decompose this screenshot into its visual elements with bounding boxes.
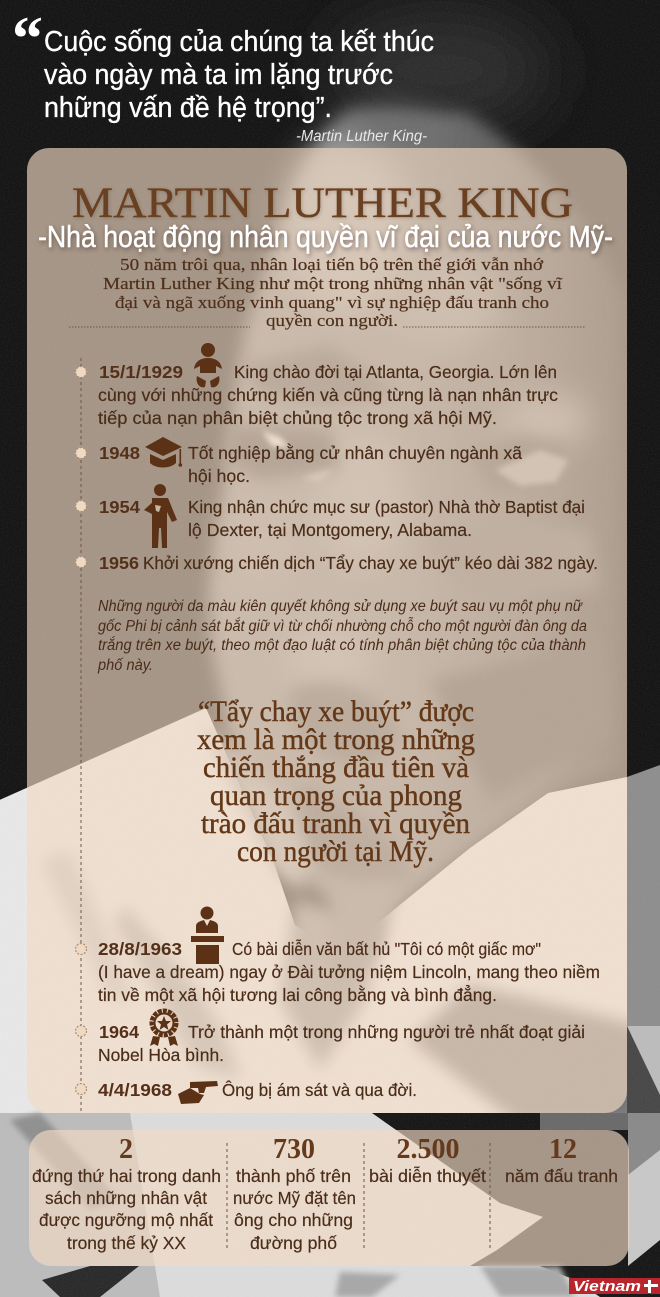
stat: 730 [233,1134,356,1253]
event: 1954 pastor: 1954 [99,497,140,517]
callout: quan trọng của phong [210,779,462,812]
stat: 2: đứng thứ hai trong danh [32,1166,221,1186]
stat: 730: thành phố trên [236,1166,351,1186]
stat: 2.500: 2.500 [396,1134,460,1165]
stat: 2: sách những nhân vật [45,1188,207,1208]
event: 1964 Nobel: Nobel Hòa bình. [98,1045,224,1065]
event: 1963 speech: (I have a dream) ngay ở Đài tưởng niệm Lincoln, mang theo niềm [98,962,600,982]
lower shirt and tie [130,1113,600,1297]
event: 1948 graduation: hội học. [188,466,250,486]
panel: main biography [27,148,627,1113]
boycott explanation [97,598,587,674]
boycott explanation: Những người da màu kiên quyết không sử dụng xe buýt sau vụ một phụ nữ [98,598,583,615]
event: 1948 graduation: Tốt nghiệp bằng cử nhân chuyên ngành xã [188,442,522,463]
event: 1963 speech: 28/8/1963 [98,939,182,959]
face [208,112,625,925]
callout: trào đấu tranh vì quyền [201,807,470,840]
stat: 730: nước Mỹ đặt tên [233,1188,356,1208]
intro text: quyền con người. [266,311,398,330]
panel: statistics [29,1130,629,1266]
logo: Vietnam+: Vietnam [573,1278,641,1295]
boycott explanation: gốc Phi bị cảnh sát bắt giữ vì từ chối nhường chỗ cho một người đàn ông da [98,618,587,635]
boycott explanation: trắng trên xe buýt, theo một đạo luật có tính phân biệt chủng tộc của thành [98,637,586,654]
icon: pastor [144,484,177,548]
stat: 2: được ngưỡng mộ nhất [39,1210,213,1230]
event: 1929 birth: King chào đời tại Atlanta, Georgia. Lớn lên [234,362,557,382]
icon: speaker at lectern [191,906,224,964]
callout: chiến thắng đầu tiên và [203,751,469,784]
callout: con người tại Mỹ. [237,835,434,868]
event: 1929 birth: cùng với những chứng kiến và cũng từng là nạn nhân trực [98,385,558,405]
event: 1929 birth: tiếp của nạn phân biệt chủng tộc trong xã hội Mỹ. [98,408,497,428]
icon: graduation cap [145,437,182,468]
stat: 12: năm đấu tranh [505,1166,618,1186]
event: 1963 speech [98,938,600,1005]
forehead highlights [272,92,592,672]
event: 1954 pastor [99,497,585,540]
logo: Vietnam+ [569,1278,660,1295]
event: 1956 boycott: 1956 [99,553,139,573]
event: 1963 speech: Có bài diễn văn bất hủ "Tôi có một giấc mơ" [232,938,541,959]
stat: 2 [32,1134,221,1253]
event: 1954 pastor: King nhận chức mục sư (pastor) Nhà thờ Baptist đại [188,497,585,517]
opening quote [44,26,434,124]
event: 1963 speech: tin về một xã hội tương lai công bằng và bình đẳng. [98,984,497,1005]
timeline axis [80,358,82,1113]
title: MARTIN LUTHER KING [72,180,573,227]
opening quote: những vấn đề hệ trọng”. [44,92,332,124]
right edge shirt [627,765,660,1026]
stat: 2.500 [369,1134,486,1186]
icon: baby [194,343,222,387]
icon: medal [150,1011,178,1046]
stat: 2: 2 [119,1134,133,1165]
event: 1948 graduation [99,442,522,486]
stat: 12 [505,1134,618,1186]
stat: 730: ông cho những [234,1210,353,1230]
event: 1956 boycott: Khởi xướng chiến dịch “Tẩy chay xe buýt” kéo dài 382 ngày. [143,553,598,573]
event: 1968 assassination: 4/4/1968 [98,1080,172,1100]
event: 1964 Nobel: 1964 [99,1022,139,1042]
stat: 2: trong thế kỷ XX [67,1233,186,1253]
statistics [32,1134,618,1253]
event: 1968 assassination: Ông bị ám sát và qua đời. [222,1079,417,1100]
stat: 730: đường phố [250,1233,337,1253]
event: 1964 Nobel [98,1022,585,1065]
callout: xem là một trong những [197,723,475,756]
quote attribution: -Martin Luther King- [296,128,427,145]
stat: 12: 12 [549,1134,577,1165]
intro text: 50 năm trôi qua, nhân loại tiến bộ trên thế giới vẫn nhớ [120,255,544,274]
opening quote: Cuộc sống của chúng ta kết thúc [44,26,434,58]
callout [197,695,475,868]
eyebrows, eyes and nose shadows [232,348,596,874]
event: 1954 pastor: lộ Dexter, tại Montgomery, Alabama. [188,520,472,540]
opening quote: vào ngày mà ta im lặng trước [44,59,393,91]
callout: “Tẩy chay xe buýt” được [198,695,474,728]
shirt folds [40,720,385,1080]
quote mark: “ [12,5,43,73]
intro text [103,255,563,330]
icon: gun [178,1081,218,1104]
event: 1964 Nobel: Trở thành một trong những người trẻ nhất đoạt giải [188,1022,585,1042]
stat: 2.500: bài diễn thuyết [369,1165,486,1186]
timeline nodes [76,366,86,1094]
boycott explanation: phố này. [97,657,153,674]
intro text: đại và ngã xuống vinh quang" vì sự nghiệp đấu tranh cho [115,293,549,312]
event: 1968 assassination [98,1079,417,1100]
shirt collar, left [0,708,627,1130]
stat: 730: 730 [273,1134,315,1165]
event: 1929 birth [98,362,558,428]
event: 1948 graduation: 1948 [99,443,140,463]
event: 1929 birth: 15/1/1929 [99,362,183,382]
intro text: Martin Luther King như một trong những nhân vật "sống vĩ [103,274,563,293]
